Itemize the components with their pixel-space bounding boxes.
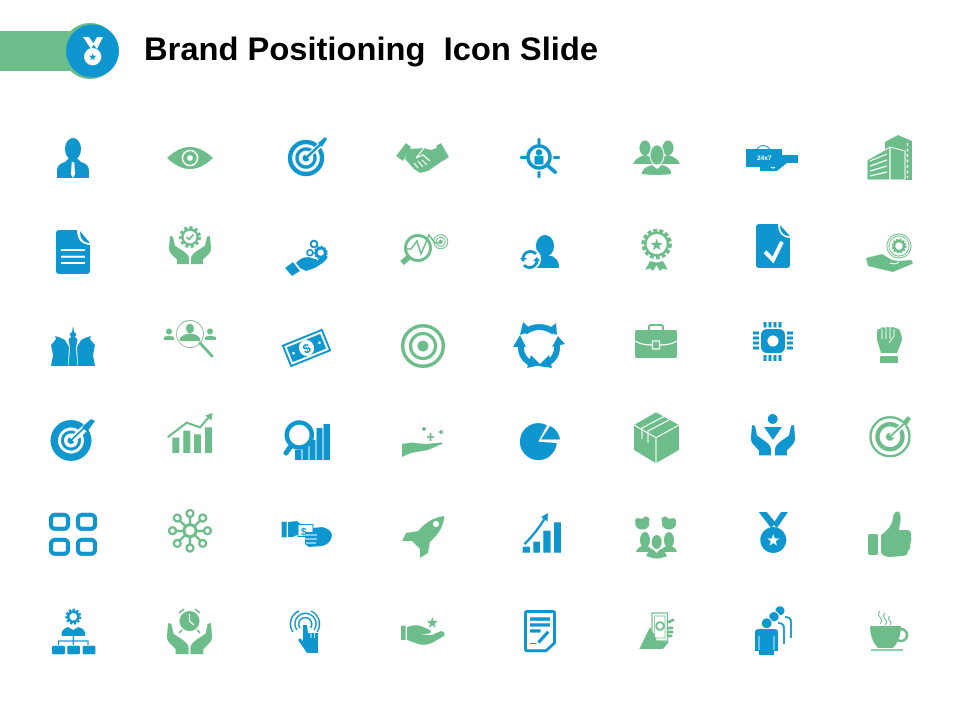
icon: dollar banknote [283, 330, 330, 366]
icon: network hub [169, 510, 211, 551]
icon: magnifier with trend and target [402, 235, 448, 263]
icon: hands holding gear check [169, 228, 211, 264]
icon: signed document [526, 612, 554, 651]
icon: green target with arrow [870, 416, 912, 456]
icon: eye [167, 147, 213, 169]
icon: steaming coffee cup [870, 611, 907, 650]
icon: document with check [756, 224, 790, 268]
icon: 24x7 sign [746, 146, 798, 171]
icon: medal with star [759, 512, 788, 553]
icon: thumbs up [868, 511, 911, 557]
icon: hands with person [751, 414, 795, 455]
header band with medal badge [0, 23, 119, 79]
icon: touch gesture [290, 611, 320, 653]
icon: cardboard box [634, 412, 679, 463]
icon: handshake [396, 143, 449, 173]
icon: hand holding cash [639, 613, 673, 649]
icon: circular arrows [513, 322, 565, 368]
icon: award rosette [643, 230, 670, 271]
icon: leader with org hierarchy [52, 610, 95, 654]
icon: businessman [57, 138, 89, 178]
icon: search person [520, 138, 560, 178]
icon: office building [867, 135, 912, 180]
icon: chess pieces [51, 326, 95, 366]
icon: growth bar chart [168, 413, 212, 453]
icon: target with thick arrow [50, 418, 96, 461]
icon: target with arrow [290, 137, 327, 174]
icon: bar chart with rising arrow [523, 513, 561, 553]
icon: briefcase [635, 325, 677, 358]
icon: rocket [402, 516, 444, 558]
icon: hands with alarm clock [167, 609, 212, 654]
icon: document [56, 230, 90, 274]
icon: hand with plus signs [402, 427, 443, 457]
icon: person with sync arrows [519, 235, 559, 270]
icon: people search [164, 320, 216, 356]
icon: microchip [753, 322, 793, 361]
icon: team with thought clouds [635, 516, 677, 558]
icon: hands exchanging money: $ [301, 527, 307, 538]
icon: hand with gear [866, 234, 913, 272]
icon: hands exchanging money [282, 521, 332, 547]
title: Brand Positioning Icon Slide [144, 31, 598, 67]
icon: hand with gears [285, 241, 328, 276]
icon: team of three [633, 140, 680, 175]
icon: group of people [755, 606, 791, 655]
icon: raised fist [877, 327, 902, 363]
icon: four square grid [51, 515, 95, 554]
icon: magnifier over bars [286, 422, 330, 460]
icon: bullseye rings [403, 326, 443, 366]
icon: pie chart [520, 423, 560, 460]
icon: 24x7 sign: 24x7 [757, 155, 772, 162]
icon: hand with star [401, 617, 445, 645]
icon: dollar banknote: $ [301, 340, 314, 357]
